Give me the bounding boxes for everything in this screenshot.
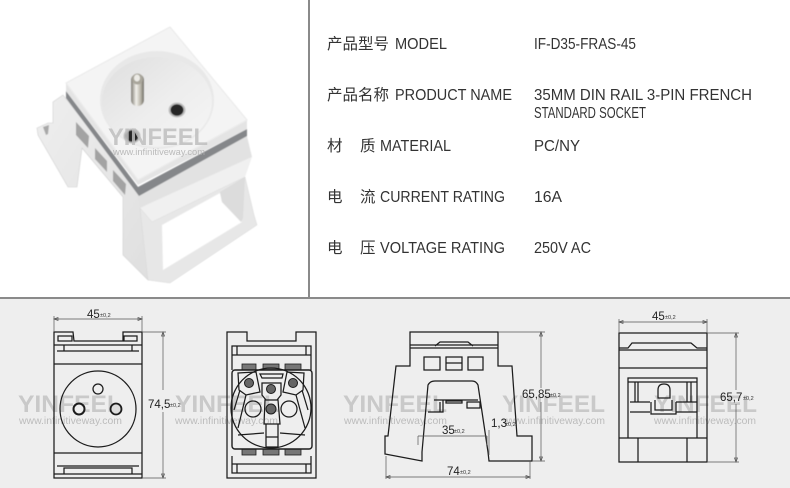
dimension: 65,85: ±0,2 xyxy=(550,393,561,399)
drawing watermarks: YINFEEL xyxy=(18,391,122,418)
spec: current rating xyxy=(327,188,563,206)
dimension: 45: ±0,2 xyxy=(665,315,676,321)
drawing watermarks: www.infinitiveway.com xyxy=(18,416,122,427)
panel: drawings background xyxy=(0,298,790,488)
vertical divider xyxy=(308,0,310,297)
drawing 4: end view xyxy=(619,311,754,462)
dimension: 65,7 xyxy=(707,333,754,462)
product photo: French DIN rail socket xyxy=(37,27,257,283)
front view outline xyxy=(54,332,142,478)
dimension: 74: 74 xyxy=(447,466,460,478)
photo: gray seal band xyxy=(66,91,247,196)
spec: model: IF-D35-FRAS-45 xyxy=(534,36,636,53)
dimension: 35 xyxy=(418,425,487,445)
dimension: 35: ±0,2 xyxy=(454,429,465,435)
photo: side wall and foot xyxy=(37,95,152,280)
end view inner opening xyxy=(628,378,697,438)
spec: current rating: 16A xyxy=(534,189,563,206)
drawing 2: rear view xyxy=(227,332,316,478)
photo: window inner wall xyxy=(220,177,245,222)
spec: material: 材 xyxy=(327,137,343,155)
spec: material xyxy=(327,137,580,155)
rear view tabs xyxy=(242,364,301,455)
side view outline xyxy=(385,332,532,461)
dimension: 1,3: 1,3 xyxy=(491,418,507,430)
photo: front frame xyxy=(140,177,257,283)
spec: model xyxy=(327,35,636,53)
spec: material: MATERIAL xyxy=(380,138,451,155)
spec: model: 产品型号 xyxy=(327,35,389,53)
spec: current rating: 流 xyxy=(360,188,376,206)
photo: frame top surface xyxy=(140,157,252,222)
spec: current rating: CURRENT RATING xyxy=(380,189,505,206)
photo watermark: www.infinitiveway.com xyxy=(112,147,205,158)
spec: voltage rating: 压 xyxy=(360,240,376,257)
rear view body and circle xyxy=(231,368,312,449)
dimension: 45: 45 xyxy=(87,309,100,321)
spec: voltage rating: VOLTAGE RATING xyxy=(380,240,505,257)
spec: voltage rating: 电 xyxy=(327,239,343,257)
drawing 3: side view xyxy=(385,332,561,479)
dimension: 74,5 xyxy=(142,332,181,478)
photo: socket holes xyxy=(124,102,186,144)
dimension: 35: 35 xyxy=(442,425,455,437)
spec: model: MODEL xyxy=(395,36,447,53)
front view socket circle xyxy=(60,371,136,447)
dimension: 65,85 xyxy=(498,332,561,461)
rear view rails xyxy=(232,346,311,473)
rear view terminal holes xyxy=(245,401,297,417)
spec: material: 质 xyxy=(360,137,376,155)
dimension: 45 xyxy=(54,309,142,332)
side view windows xyxy=(424,357,483,370)
side view top details xyxy=(410,342,498,348)
dimension: 74 xyxy=(386,456,530,479)
spec: voltage rating: 250V AC xyxy=(534,240,591,257)
drawing 1: front view xyxy=(54,309,181,478)
dimension: 65,7: 65,7 xyxy=(720,392,742,404)
end view top details xyxy=(619,343,707,368)
rear view screws xyxy=(244,378,298,414)
drawing watermarks: YINFEEL xyxy=(502,391,605,418)
drawing watermarks: www.infinitiveway.com xyxy=(653,416,756,427)
spec table xyxy=(327,35,752,257)
photo: top face xyxy=(66,27,247,185)
spec: product name: 产品名称 xyxy=(327,86,389,104)
drawing watermarks: www.infinitiveway.com xyxy=(174,416,278,427)
dimension: 65,7: ±0,2 xyxy=(743,396,754,402)
dimension: 1,3: ±0,2 xyxy=(505,422,516,428)
end view keyhole clip xyxy=(651,384,676,414)
side view inner clips xyxy=(428,400,480,412)
spec: product name xyxy=(327,86,752,122)
dimension: 1,3 xyxy=(489,418,516,455)
rear view outline xyxy=(227,332,316,478)
dimension: 74,5: 74,5 xyxy=(148,399,170,411)
front view clips and bars xyxy=(54,336,142,474)
spec: product name: 35MM DIN RAIL 3-PIN FRENCH xyxy=(534,87,752,104)
photo: earth pin xyxy=(131,74,144,106)
drawing watermarks xyxy=(18,391,757,427)
end view feet xyxy=(619,438,707,462)
spec: current rating: 电 xyxy=(327,188,343,206)
spec: product name: STANDARD SOCKET xyxy=(534,105,646,122)
spec: product name: PRODUCT NAME xyxy=(395,87,512,104)
photo: front ledge xyxy=(136,132,252,208)
end view outline xyxy=(619,333,707,462)
photo: foot notch xyxy=(43,125,49,135)
dimension: 74: ±0,2 xyxy=(460,470,471,476)
horizontal divider xyxy=(0,297,790,299)
drawing watermarks: YINFEEL xyxy=(654,391,757,418)
rear view terminals xyxy=(234,372,308,447)
photo: side slots xyxy=(76,122,126,195)
photo: socket recess xyxy=(100,51,214,149)
photo: frame window xyxy=(162,193,242,270)
background: top white panel xyxy=(0,0,790,297)
dimension: 45 xyxy=(619,311,707,333)
drawing watermarks: www.infinitiveway.com xyxy=(502,416,605,427)
drawing watermarks: www.infinitiveway.com xyxy=(343,416,447,427)
photo watermark: YINFEEL xyxy=(108,124,208,151)
drawing watermarks: YINFEEL xyxy=(343,391,447,418)
dimension: 74,5: ±0,2 xyxy=(170,403,181,409)
spec: voltage rating xyxy=(327,239,591,257)
drawing watermarks: YINFEEL xyxy=(175,391,279,418)
dimension: 45: ±0,2 xyxy=(100,313,111,319)
spec: material: PC/NY xyxy=(534,138,580,155)
dimension: 45: 45 xyxy=(652,311,665,323)
dimension: 65,85: 65,85 xyxy=(522,389,551,401)
